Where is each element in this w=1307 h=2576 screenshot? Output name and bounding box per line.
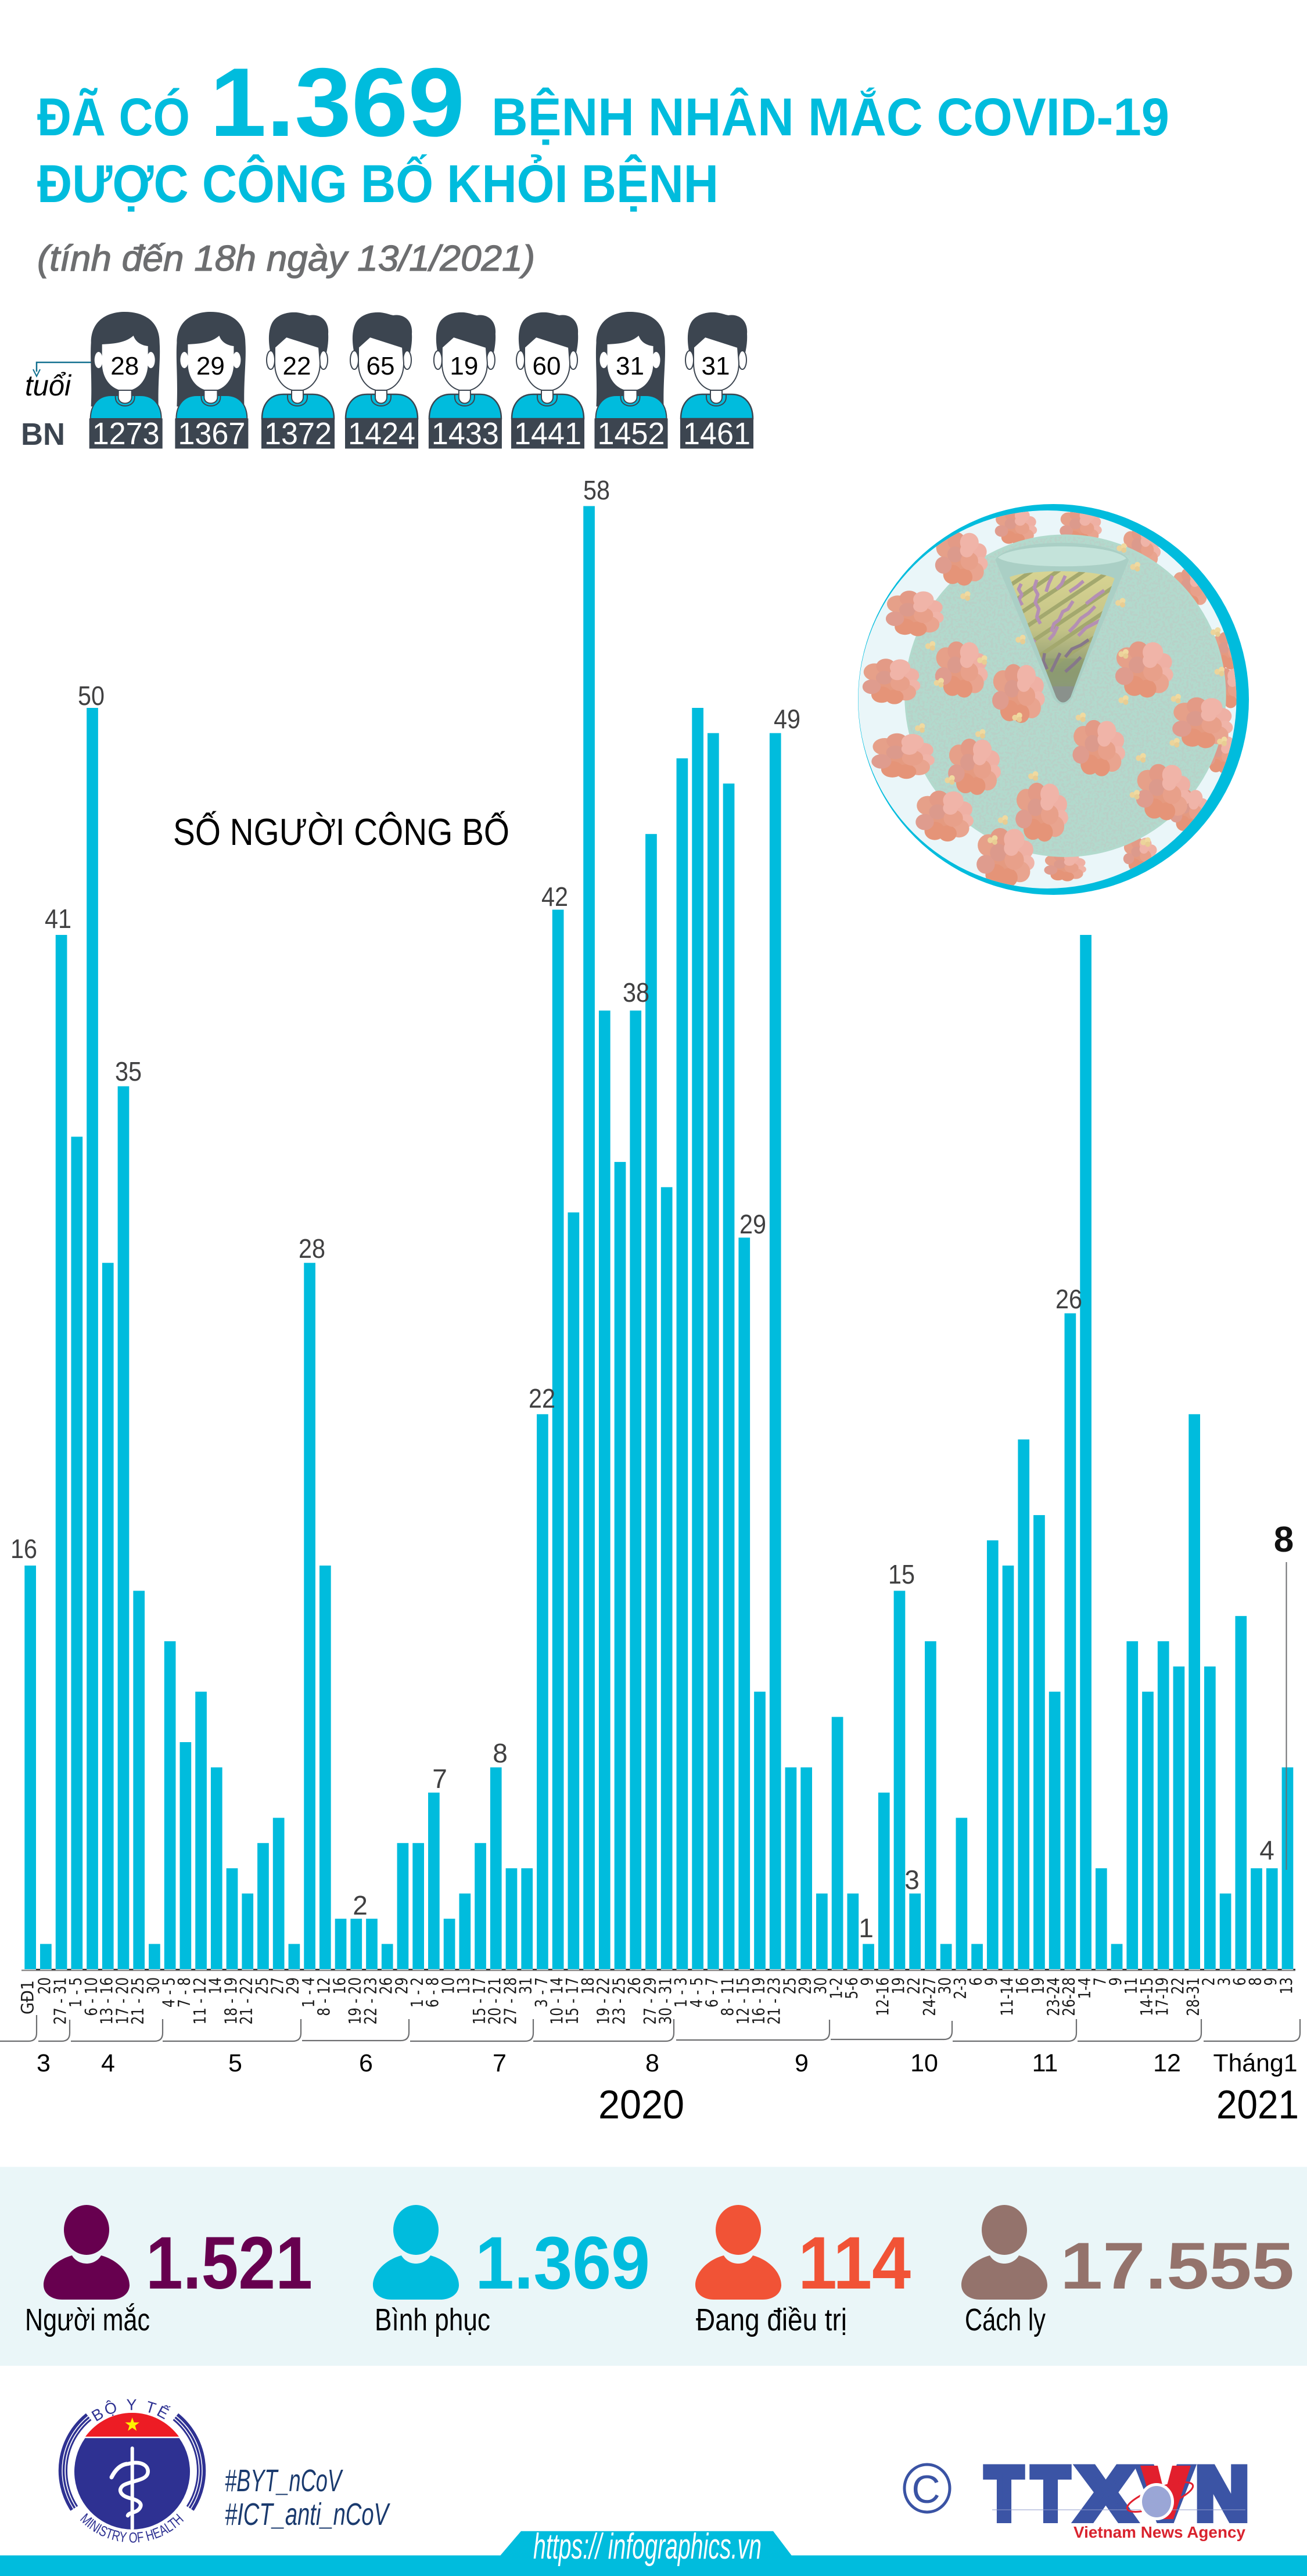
title: BỆNH NHÂN MẮC COVID-19 [491,87,1169,147]
chart heading: SỐ NGƯỜI CÔNG BỐ [173,811,509,853]
stat: quarantine [961,2205,1294,2337]
month labels: 7 [493,2049,507,2077]
patient 1433 [429,312,502,451]
stat: infected: Người mắc [25,2302,150,2337]
patient 1372 [261,312,335,451]
footer bar with website tab [0,2527,1307,2576]
date labels on x axis: 15 - 17 [563,1977,583,2024]
patient 1452: 31 [616,352,644,380]
date labels on x axis: 7 [1091,1977,1110,1986]
date labels on x axis: 1-4 [1076,1977,1095,1999]
date labels on x axis: 17 - 20 [113,1977,132,2024]
back spikes [995,509,1248,882]
month labels: 8 [645,2049,659,2077]
month labels: 5 [228,2049,242,2077]
footer bar with website tab: https:// infographics.vn [533,2527,762,2567]
value labels: 58 [583,475,610,505]
date labels on x axis: 27 - 28 [501,1977,520,2024]
date labels on x axis: 6 [1231,1977,1250,1986]
patient 1424: 65 [367,352,394,380]
logo: Ministry of Health [58,2399,206,2543]
date labels on x axis: 18 - 19 [222,1977,241,2024]
date labels on x axis: 15 - 17 [470,1977,490,2024]
date labels on x axis: 16 - 19 [749,1977,769,2024]
month labels: 12 [1153,2049,1181,2077]
date labels on x axis: 24-27 [920,1977,939,2016]
patient 1433: 1433 [432,416,499,451]
stat: recovered: 1.369 [475,2222,650,2305]
date labels on x axis: 2-3 [951,1977,971,1999]
hashtags: #ICT_anti_nCoV [225,2497,391,2532]
value labels: 2 [353,1890,368,1920]
stat: quarantine: 17.555 [1060,2229,1294,2303]
month labels: 11 [1032,2049,1058,2077]
date labels on x axis: 13 [1277,1977,1297,1994]
date labels on x axis: 26-28 [1060,1977,1079,2016]
date labels on x axis: 30 [936,1977,955,1994]
patient 1441: 60 [533,352,561,380]
date labels on x axis: 22 - 23 [361,1977,381,2024]
panel: summary statistics [0,2167,1307,2366]
date labels on x axis [17,1977,1297,2024]
copyright symbol: C [911,2467,940,2512]
date labels on x axis: 12 - 15 [734,1977,753,2024]
logo: TTXVN: Vietnam News Agency [1073,2523,1245,2541]
value labels: 4 [1259,1835,1274,1865]
patient 1441: 1441 [514,416,581,451]
value labels: 35 [115,1056,142,1086]
date labels on x axis: 9 [858,1977,878,1986]
date labels on x axis: 10 [439,1977,458,1994]
stat: infected [25,2205,313,2337]
date labels on x axis: 14-15 [1137,1977,1157,2016]
date labels on x axis: 19 - 20 [346,1977,365,2024]
month labels: 4 [101,2049,115,2077]
date labels on x axis: 20 [35,1977,55,1994]
date labels on x axis: 31 [517,1977,536,1994]
logo: TTXVN: T [1032,2451,1069,2536]
date labels on x axis: 6 - 10 [82,1977,102,2016]
date labels on x axis: 16 [331,1977,350,1994]
hashtags: #BYT_nCoV [225,2463,343,2498]
patient 1461: 31 [702,352,730,380]
virus illustration [858,504,1249,895]
date labels on x axis: 21 - 25 [129,1977,148,2024]
value labels: 3 [904,1865,920,1895]
stat: quarantine: Cách ly [965,2302,1046,2337]
date labels on x axis: 6 - 8 [423,1977,443,2007]
logo: TTXVN: N [1195,2451,1249,2536]
label: age [25,362,110,402]
date labels on x axis: 8 - 11 [719,1977,738,2016]
value labels: 26 [1055,1284,1082,1314]
front spikes [863,532,1233,887]
envelope sphere [904,534,1226,857]
date labels on x axis: GĐ1 [17,1980,38,2014]
date labels on x axis: 21 - 23 [765,1977,784,2024]
patient 1433: 19 [450,352,478,380]
subtitle: date: (tính đến 18h ngày 13/1/2021) [37,239,535,279]
month labels: Tháng1 [1213,2049,1298,2077]
date labels on x axis: 18 [579,1977,598,1994]
logo: Ministry of Health: BỘ Y TẾ [91,2399,171,2422]
date labels on x axis: 10 - 14 [548,1977,567,2024]
date labels on x axis: 26 [626,1977,645,1994]
value labels: 29 [739,1209,766,1239]
date labels on x axis: 3 - 7 [532,1977,551,2007]
date labels on x axis: 28-31 [1184,1977,1204,2016]
date labels on x axis: 1 - 2 [408,1977,428,2007]
patient 1367: 29 [196,352,225,380]
title: ĐƯỢC CÔNG BỐ KHỎI BỆNH [37,154,719,214]
year labels: 2021 [1216,2082,1299,2127]
date labels on x axis: 11-14 [998,1977,1017,2016]
stat: under treatment [695,2205,911,2337]
patient 1372: 22 [283,352,311,380]
date labels on x axis: 27 [268,1977,288,1994]
value labels: 42 [541,882,568,912]
date labels on x axis: 23 - 25 [610,1977,629,2024]
stat: recovered [373,2205,650,2337]
date labels on x axis: 1 - 5 [67,1977,86,2007]
patient 1461 [680,312,753,451]
date labels on x axis: 19 - 22 [594,1977,613,2024]
logo: TTXVN: T [985,2451,1023,2536]
stat: under treatment: 114 [798,2222,911,2305]
date labels on x axis: 13 - 16 [98,1977,117,2024]
value labels: 38 [623,977,649,1008]
date labels on x axis: 9 [1262,1977,1281,1986]
copyright symbol [904,2465,950,2512]
date labels on x axis: 8 - 12 [315,1977,334,2016]
date labels on x axis: 30 [144,1977,163,1994]
stat: recovered: Bình phục [375,2302,490,2337]
logo: TTXVN: V [1139,2451,1192,2536]
date labels on x axis: 27 - 29 [641,1977,660,2024]
date labels on x axis: 1-2 [827,1977,846,1999]
patient 1367: 1367 [178,416,245,451]
patient 1273 [89,312,163,451]
label: BN: BN [21,417,65,452]
value labels: 8 [493,1738,508,1768]
month labels: 3 [37,2049,51,2077]
date labels on x axis: 9 [1107,1977,1126,1986]
month labels: 6 [359,2049,373,2077]
patients row [21,312,753,452]
date labels on x axis: 25 [781,1977,800,1994]
patient 1461: 1461 [683,416,751,451]
year labels [598,2082,1299,2127]
logo: TTXVN [985,2451,1249,2541]
date labels on x axis: 6 [967,1977,986,1986]
date labels on x axis: 29 [796,1977,816,1994]
patient 1273: 28 [110,352,139,380]
patient 1452 [595,312,668,451]
title: 1.369 [210,48,465,157]
date labels on x axis: 11 [1122,1977,1141,1994]
date labels on x axis: 1 - 3 [672,1977,691,2007]
date labels on x axis: 1 - 4 [300,1977,319,2007]
value labels: 15 [888,1559,915,1589]
month labels [37,2049,1298,2077]
date labels on x axis: 13 [455,1977,474,1994]
value labels: 16 [10,1534,37,1564]
logo: Ministry of Health: MINISTRY OF HEALTH [80,2513,184,2543]
date labels on x axis: 7 - 8 [175,1977,195,2007]
small yellow proteins [915,543,1227,847]
value labels: 28 [299,1233,325,1264]
stat: under treatment: Đang điều trị [696,2302,847,2337]
value labels: 22 [529,1383,555,1413]
title: ĐÃ CÓ [37,87,190,147]
month brackets [0,2015,1300,2041]
date labels on x axis: 2 [1200,1977,1219,1986]
date labels on x axis: 19 [1029,1977,1049,1994]
month labels: 10 [910,2049,938,2077]
date labels on x axis: 22 [1169,1977,1188,1994]
date labels on x axis: 23-24 [1044,1977,1064,2016]
year labels: 2020 [598,2082,684,2127]
patient 1452: 1452 [597,416,665,451]
date labels on x axis: 11 - 12 [191,1977,210,2024]
date labels on x axis: 19 [889,1977,909,1994]
hashtags [225,2463,391,2532]
patient 1273: 1273 [92,416,160,451]
date labels on x axis: 29 [393,1977,412,1994]
date labels on x axis: 8 [1246,1977,1266,1986]
date labels on x axis: 4 - 5 [688,1977,707,2007]
date labels on x axis: 25 [253,1977,272,1994]
month labels: 9 [795,2049,809,2077]
date labels on x axis: 21 - 22 [238,1977,257,2024]
date labels on x axis: 9 [982,1977,1001,1986]
value labels: 41 [45,904,71,934]
label: age: tuổi [25,369,72,402]
value labels: 49 [774,704,800,734]
date labels on x axis: 12-16 [874,1977,893,2016]
patient 1372: 1372 [264,416,332,451]
logo: TTXVN: X [1078,2451,1134,2536]
date labels on x axis: 30 - 31 [656,1977,676,2024]
date labels on x axis: 20 - 21 [486,1977,505,2024]
patient 1367 [175,312,248,451]
date labels on x axis: 5-6 [843,1977,862,1999]
date labels on x axis: 29 [284,1977,303,1994]
date labels on x axis: 14 [206,1977,225,1994]
highlighted latest value with leader line: 8 [1274,1520,1294,1560]
date labels on x axis: 27 - 31 [51,1977,70,2024]
date labels on x axis: 16 [1014,1977,1033,1994]
patient 1424 [345,312,418,451]
stat: infected: 1.521 [146,2222,313,2305]
date labels on x axis: 17-19 [1153,1977,1172,2016]
patient 1441 [511,312,584,451]
date labels on x axis: 3 [1215,1977,1234,1986]
date labels on x axis: 4 - 5 [160,1977,179,2007]
bar chart [24,506,1293,1969]
value labels: 7 [432,1764,447,1794]
date labels on x axis: 30 [812,1977,831,1994]
date labels on x axis: 6 - 7 [703,1977,722,2007]
cutaway cone [995,543,1129,709]
date labels on x axis: 22 [905,1977,924,1994]
value labels: 50 [78,681,105,711]
value labels: 1 [859,1913,874,1943]
title [37,48,1169,214]
date labels on x axis: 26 [377,1977,396,1994]
value labels [10,475,1274,1943]
patient 1424: 1424 [348,416,415,451]
